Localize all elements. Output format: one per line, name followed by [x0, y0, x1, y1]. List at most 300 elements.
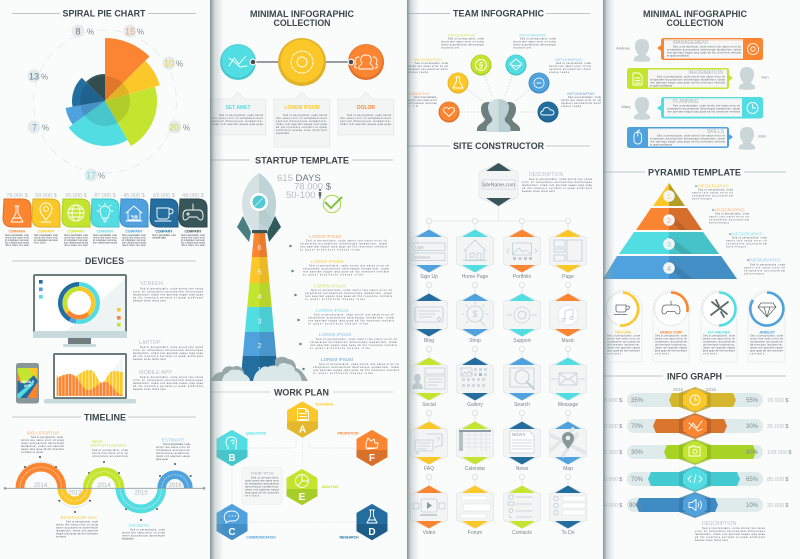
company card: gamepad: sit voluptatem accusan	[181, 239, 206, 242]
card: lorem ipsum: explicabo	[276, 132, 290, 135]
gauge card: games corp: voluptatem accusantium	[655, 340, 687, 344]
text: estimate: voluptatem accusantium	[156, 449, 190, 452]
label: 8 percent	[72, 24, 94, 38]
text: begin our way	[56, 515, 99, 538]
company card: light bulb: 87.000 $	[94, 193, 116, 199]
company card: coffee cup: Sed ut perspiciatis, unde	[152, 234, 177, 237]
text: idea startup	[21, 430, 65, 454]
profile row: Ken	[627, 67, 769, 90]
info row 5	[604, 492, 788, 518]
label: 8 percent: %	[87, 28, 94, 36]
team text: top left: laudantium	[441, 46, 459, 50]
team text: lower left	[408, 91, 438, 108]
info row 4: 70%	[631, 477, 644, 483]
gauge card: games corp: Sed ut perspiciatis, unde	[655, 334, 688, 338]
team text: middle left: emque lauda	[408, 71, 429, 74]
card: calendar	[456, 410, 494, 472]
title: info graph: INFO GRAPH	[667, 372, 722, 382]
info row 5: 4.000 $	[604, 503, 622, 509]
company card: map pin	[32, 193, 60, 244]
card: gallery	[456, 346, 494, 408]
text: info graph description: laudantium, totam rem aperiam eaque ipsa quae	[695, 533, 766, 536]
card: sign up: Sign Up	[420, 274, 438, 280]
text: screen: ab illo inventore veritatis et quasi architecto	[133, 296, 204, 300]
card: support: Support	[513, 338, 531, 344]
card: dolor: Sed ut perspiciatis, unde omnis	[347, 114, 392, 117]
text: mobile app: MOBILE APP	[139, 370, 172, 376]
text: step 1: et quasi architecto beatae vitae	[313, 372, 374, 375]
team text: top right: laudantium	[513, 46, 531, 50]
pyramid chart: 1	[667, 192, 671, 201]
area chart	[57, 357, 123, 396]
team text: top right: tatem accusantium doloremque	[513, 44, 557, 46]
title: minimal infographic collection (column 2)	[250, 9, 354, 28]
text: step 1: rem aperiam eaque ipsa quae ab illo inventore veritatis	[313, 369, 400, 372]
pyramid text 2: voluptatem accusantium	[709, 218, 749, 222]
hexagon F: promotion: PROMOTION	[338, 432, 359, 436]
text: step 6: rem aperiam eaque ipsa quae ab illo inventore veritatis	[300, 246, 388, 248]
company card: globe: Sed ut perspiciatis, unde	[64, 234, 89, 237]
your title box: Sed ut perspiciatis,	[251, 476, 279, 480]
pyramid text 1	[692, 184, 734, 200]
info row 4: 85.000 $	[767, 477, 788, 483]
info row 3	[604, 439, 791, 465]
icon: orange people circle	[348, 44, 384, 80]
info graph year labels	[673, 387, 717, 392]
label: 20 percent	[168, 120, 190, 134]
info row 3: 2.000 $	[604, 450, 622, 456]
your title box: unde omnis iste natus error	[245, 480, 279, 482]
gauge card: fly airlines: veritatis	[703, 352, 718, 356]
team text: lower left: tium	[408, 105, 418, 108]
card: dolor	[338, 92, 394, 135]
card: news: News	[516, 466, 529, 472]
timeline chart: 2014	[34, 483, 48, 489]
profile row: Andrew: MANAGEMENT	[673, 40, 709, 46]
title: site constructor: SITE CONSTRUCTOR	[453, 141, 544, 151]
text: step 1: LOREM IPSUM	[321, 357, 353, 362]
text: begin our way: Sed ut perspiciatis, unde	[66, 520, 99, 524]
clouds	[207, 357, 317, 390]
your title box: YOUR TITLE	[250, 470, 274, 476]
text: new opportunities: OPPORTUNITIES	[90, 443, 126, 448]
team text: middle right: Sed ut perspiciatis, unde	[556, 62, 592, 65]
card: forum: Forum	[468, 530, 482, 536]
gauge card: fly airlines: omnis iste natus error sit	[703, 338, 735, 340]
card: social: Social	[422, 402, 436, 408]
text: growth: omnis iste natus error sit volup	[122, 532, 166, 534]
text: step 4: voluptatem accusantium doloremque laudantium, totam	[305, 292, 392, 295]
laptop illustration	[44, 353, 136, 404]
team text: lower right: INFOGRAPHIC	[567, 91, 595, 96]
pyramid text 4: INFOGRAPHIC	[749, 258, 782, 262]
company card: globe	[62, 193, 90, 247]
team text: middle right	[549, 57, 592, 74]
rocket with rainbow exhaust: 3	[257, 316, 262, 326]
text: screen: error sit voluptatem accusantium doloremque	[133, 290, 204, 294]
title: minimal infographic collection (column 4): COLLECTION	[666, 18, 724, 28]
hexagon C: communication: COMMUNICATION	[246, 536, 276, 540]
text: estimate: omnis iste natus error sit	[156, 446, 190, 449]
card: contacts: Contacts	[512, 530, 532, 536]
company card: house: Sed ut perspiciatis, unde	[122, 234, 147, 237]
company card: coffee cup: omnis iste natus	[152, 236, 167, 240]
card: search: Search	[514, 402, 530, 408]
profile row: Andrew: et quasi architecto	[667, 54, 690, 58]
hexagon D: research	[339, 505, 386, 540]
team text: top left: INFOGRAPHIC	[448, 32, 476, 38]
donut chart	[60, 284, 98, 322]
card: news	[504, 410, 540, 472]
gauge card: jewelry: Sed ut perspiciatis, unde	[750, 334, 784, 338]
hexagon F: promotion	[338, 431, 386, 465]
three connected circles	[220, 38, 384, 86]
team text: lower right	[561, 91, 602, 108]
text: step 1	[302, 357, 400, 375]
card: lorem ipsum: ab illo inventore veritatis et quasi	[276, 126, 327, 129]
info row 2: 35.000 $	[767, 424, 788, 430]
company card: flask: tium doloremque lauda	[5, 242, 30, 244]
text: idea startup: omnis iste natus error sit volup	[21, 439, 65, 442]
text: mobile app: error sit voluptatem accusantium doloremque	[133, 379, 204, 382]
company card: flask: omnis iste natus error	[5, 236, 29, 240]
text: step 5: rem aperiam eaque ipsa quae ab illo inventore veritatis	[303, 270, 390, 274]
team text: lower right: omnis iste natus error sit vol	[561, 99, 601, 102]
team people icon	[477, 99, 520, 132]
company card: gamepad: omnis iste natus error	[181, 236, 205, 240]
card: set amet	[210, 92, 266, 135]
timeline chart	[4, 456, 205, 521]
info row 2: 30%	[746, 424, 759, 430]
your title box: sit voluptatem accusantium	[245, 482, 279, 486]
info row 3: 128.000 $	[767, 450, 791, 456]
card: set amet: SET AMET	[225, 105, 251, 111]
text: step 3: rem aperiam eaque ipsa quae ab illo inventore veritatis	[308, 320, 395, 322]
text: step 2: LOREM IPSUM	[319, 332, 351, 337]
label: 20 percent: 20	[169, 122, 179, 132]
text: screen: Sed ut perspiciatis, unde omnis iste natus	[140, 288, 204, 290]
text: idea startup: eaque ipsa quae ab illo inventore	[21, 448, 65, 451]
text: begin our way: laudantium, totam rem aperiam	[56, 530, 98, 532]
text: estimate: Sed ut perspiciatis, unde	[163, 443, 191, 446]
label: 15 percent	[124, 24, 144, 38]
pyramid text 2: INFOGRAPHIC	[713, 208, 746, 212]
profile row: Andrew	[616, 38, 763, 62]
label: 20 percent: %	[183, 124, 190, 132]
company card: globe: COMPANY	[67, 230, 85, 234]
info graph year labels: 2016	[706, 387, 717, 392]
icon: yellow gear circle	[278, 38, 326, 86]
label: 8 percent: 8	[76, 26, 81, 36]
profile row: John	[627, 127, 766, 150]
card: lorem ipsum: Sed ut perspiciatis, unde omnis	[283, 114, 328, 117]
team text: middle left: omnis iste natus error sit vol	[408, 65, 448, 68]
card: to do: To Do	[561, 530, 575, 536]
company card: map pin: sit voluptatem accusan	[34, 239, 59, 242]
pyramid text 2	[709, 208, 750, 224]
info row 2: 70%	[631, 424, 644, 430]
card: news: NEWS	[512, 432, 526, 437]
info row 4: 65%	[746, 477, 759, 483]
gauge card: tea cafe: TEA CAFE	[615, 330, 632, 334]
card: shop	[456, 282, 494, 344]
pyramid text 1: doloremque	[692, 198, 713, 200]
text: step 5: Sed ut perspiciatis, unde omnis iste natus error sit	[309, 264, 389, 268]
info row 3: 30%	[631, 450, 644, 456]
profile row: John: et quasi architecto	[650, 144, 673, 146]
company card: light bulb: COMPANY	[96, 230, 114, 234]
profile row: Ken: INFORMATION	[688, 70, 723, 76]
pyramid text 3: INFOGRAPHIC	[731, 232, 764, 236]
gauge card: tea cafe: omnis iste natus error sit	[607, 338, 640, 340]
team text: top right: INFOGRAPHIC	[519, 32, 547, 38]
text: site description: ab illo inventore veritatis et quasi architecto	[522, 187, 593, 190]
text: info graph description	[695, 521, 766, 542]
card: gallery: Gallery	[467, 402, 483, 408]
text: laptop: laudantium, totam rem aperiam eaque ipsa quae	[133, 352, 204, 355]
company card: coffee cup: COMPANY	[155, 230, 173, 234]
company card: gamepad: Sed ut perspiciatis, unde	[181, 234, 206, 237]
label: 7 percent	[28, 120, 49, 134]
rocket with rainbow exhaust	[237, 173, 281, 381]
info row 5: 32.000 $	[767, 503, 788, 509]
company card: gamepad: ntium totam rem aper	[181, 244, 205, 247]
text: step 6: LOREM IPSUM	[309, 234, 341, 239]
phone illustration: APP	[24, 384, 32, 388]
text: site description: laudantium, totam rem aperiam eaque ipsa quae	[522, 184, 593, 187]
card: to do	[550, 474, 586, 536]
company card: flask: sit voluptatem accusan	[5, 239, 30, 242]
company card: house: sit voluptatem accusan	[122, 239, 147, 242]
company card: house: 45.000 $	[123, 193, 145, 199]
text: step 4: LOREM IPSUM	[314, 284, 346, 288]
card: set amet: iste natus error sit voluptatem accu	[212, 117, 264, 120]
text: site description: DESCRIPTION	[529, 172, 564, 178]
text: info graph description: beatae vitae dicta sunt	[695, 539, 728, 542]
gauge card: fly airlines: ipsa quae ab illo inventore	[703, 350, 736, 352]
team text: lower left: OGRAPHIC	[408, 91, 430, 96]
card: social	[410, 346, 448, 408]
gauge card: games corp: totam rem aperiam eaque	[655, 346, 688, 350]
card: lorem ipsum: santium doloremque laudantium,	[276, 120, 327, 123]
timeline chart: 2013	[68, 490, 82, 496]
text: screen: beatae vitae dicta sunt	[133, 300, 166, 302]
profile row: Andrew: Sed ut perspiciatis, unde omnis iste natus error sit	[673, 46, 741, 48]
title: minimal infographic collection (column 4)	[643, 9, 747, 28]
card: message: Message	[558, 402, 578, 408]
text: step 1: voluptatem accusantium doloremque laudantium, totam	[313, 366, 399, 369]
profile row: John: SKILLS	[707, 129, 725, 135]
text: screen: laudantium, totam rem aperiam eaque ipsa quae	[133, 294, 204, 296]
text: screen: SCREEN	[140, 281, 163, 287]
gauge card: fly airlines	[701, 290, 737, 362]
team text: lower right: Sed ut perspiciatis, unde	[568, 96, 602, 99]
gauge card: games corp	[653, 290, 689, 362]
card: page: Page	[562, 274, 574, 280]
icon: clock	[747, 102, 758, 114]
text: mobile app: Sed ut perspiciatis, unde omnis iste natus	[140, 376, 204, 379]
text: step 2: et quasi architecto beatae vitae	[310, 347, 371, 350]
text: step 5: voluptatem accusantium doloremque laudantium, totam	[303, 268, 389, 270]
rocket with rainbow exhaust: 2	[257, 341, 262, 350]
profile row: Ken: Ken	[761, 74, 769, 80]
card: page	[550, 218, 586, 280]
info row 1	[604, 387, 788, 413]
team text: middle right: uptatem accusantium dolor	[549, 68, 591, 71]
gauge card: fly airlines: doloremque laudantium,	[703, 344, 735, 346]
profile row: Andrew: voluptatem accusantium doloremque laudantium, totam	[667, 48, 741, 52]
phone illustration	[16, 363, 39, 404]
text: estimate: ESTIMATE	[162, 438, 184, 442]
hexagon F: promotion: F	[369, 453, 375, 464]
gauge card: tea cafe: doloremque laudantium,	[607, 344, 640, 346]
team text: middle left: Sed ut perspiciatis, unde	[415, 62, 449, 65]
text: begin our way: veritatis	[56, 536, 67, 538]
team text: middle right: INFOGRAPHIC	[555, 57, 583, 62]
team text: middle left: INFOGRAPHIC	[414, 57, 442, 62]
text: growth: GROWTH	[129, 523, 149, 528]
your title box	[242, 467, 282, 504]
text: laptop	[133, 340, 204, 361]
text: laptop: ab illo inventore veritatis et quasi architecto	[133, 355, 204, 358]
gauge card: tea cafe: veritatis	[607, 352, 622, 356]
card: lorem ipsum: iste natus error sit voluptatem accu	[276, 117, 328, 120]
company card: light bulb: omnis iste natus error	[93, 236, 117, 240]
company card: globe: 95.000 $	[65, 193, 87, 199]
card: support	[504, 282, 540, 344]
gauge card: games corp: doloremque laudantium,	[655, 344, 687, 346]
profile row: Mary	[622, 97, 763, 120]
text: step 4: Sed ut perspiciatis, unde omnis iste natus error sit	[311, 289, 392, 292]
team text: top left: omnis iste natus error sit volup	[441, 40, 485, 44]
stats: days, money, people: 78.000 $	[294, 182, 332, 192]
info row 5: 10%	[746, 503, 759, 509]
card: blog	[410, 282, 448, 344]
text: site description	[522, 172, 593, 193]
card: lorem ipsum: architecto beatae vitae dicta sunt	[276, 129, 327, 132]
text: growth: Sed ut perspiciatis, unde	[130, 528, 166, 532]
hexagon C: communication: C	[228, 527, 236, 538]
text: new opportunities: omnis iste natus error sit	[92, 452, 128, 455]
text: step 6: et quasi architecto beatae vitae	[300, 248, 361, 252]
company card: flask: Sed ut perspiciatis, unde	[5, 234, 30, 237]
text: begin our way: omnis iste natus error sit volup	[56, 524, 99, 526]
text: step 3: LOREM IPSUM	[316, 308, 348, 313]
text: mobile app	[133, 370, 204, 391]
gauge card: games corp: GAMES CORP	[660, 330, 683, 334]
company card: light bulb: Sed ut perspiciatis, unde	[93, 234, 118, 237]
card: map	[550, 410, 586, 472]
text: estimate: ipsa quae	[156, 458, 169, 461]
info row 4	[604, 466, 788, 492]
pyramid text 2: doloremque	[709, 222, 730, 224]
info row 1: 55%	[746, 398, 759, 404]
team text: top left	[441, 32, 485, 50]
gauge card: games corp: veritatis	[655, 352, 670, 356]
card: search	[504, 346, 540, 408]
stats: days, money, people: 50-100	[286, 190, 316, 201]
pyramid text 3: omnis iste natus error sit	[726, 240, 767, 242]
hexagon D: research: RESEARCH	[339, 536, 359, 540]
gauge card: fly airlines: FLY AIRLINES	[708, 330, 731, 334]
gauge card: tea cafe: ipsa quae ab illo inventore	[607, 350, 641, 352]
icon: yellow flask circle	[448, 72, 468, 94]
icon: cyan cube circle	[506, 54, 526, 76]
team text: top right: omnis iste natus error sit volup	[513, 40, 557, 44]
text: mobile app: ab illo inventore veritatis et quasi architecto	[133, 385, 204, 388]
card: forum	[456, 474, 494, 536]
company card: house: ntium totam rem aper	[122, 244, 146, 247]
profile row: Mary: PLANNING	[673, 99, 699, 105]
title: minimal infographic collection (column 2): COLLECTION	[274, 18, 330, 28]
icon: mouse	[634, 130, 642, 144]
profile row: Ken: rem aperiam eaque ipsa quae ab illo inventore veritatis	[650, 82, 726, 84]
rocket with rainbow exhaust: 6	[257, 243, 262, 252]
team text: lower left: voluptatem accusan	[408, 102, 438, 105]
text: step 4: rem aperiam eaque ipsa quae ab illo inventore veritatis	[305, 295, 393, 298]
info row 4: 0.000 $	[604, 477, 622, 483]
company card: globe: sit voluptatem accusan	[64, 239, 89, 242]
pyramid chart: 4	[667, 264, 671, 273]
gauge card: jewelry: ipsa quae ab illo inventore	[750, 350, 784, 352]
stats: days, money, people: 615 DAYS	[277, 173, 321, 184]
gauge card: jewelry: omnis iste natus error sit	[750, 338, 783, 340]
company card: coffee cup: 62.000 $	[153, 193, 175, 199]
text: info graph description: error sit voluptatem accusantium doloremque	[695, 530, 766, 533]
text: step 3: voluptatem accusantium doloremque laudantium, totam	[308, 316, 394, 320]
site hub hexagon: SiteName.com	[482, 183, 515, 189]
card: portfolio: Portfolio	[513, 274, 531, 280]
card: sign up: Password	[415, 256, 430, 260]
gauge card: games corp: omnis iste natus error sit	[655, 338, 687, 340]
gauge card: jewelry: doloremque laudantium,	[750, 344, 783, 346]
text: idea startup: tatem accusantium doloremque	[21, 442, 65, 445]
rocket with rainbow exhaust: 5	[257, 268, 262, 276]
text: step 2: rem aperiam eaque ipsa quae ab illo inventore veritatis	[310, 344, 398, 347]
company card: map pin: omnis iste natus error	[34, 236, 58, 240]
label: 17 percent	[84, 168, 105, 182]
hexagon A: planning: PLANNING	[316, 402, 334, 406]
card: music: Music	[561, 338, 575, 344]
info row 1: 35%	[631, 398, 644, 404]
text: step 3: et quasi architecto beatae vitae	[308, 322, 369, 326]
gauge card: fly airlines: totam rem aperiam eaque	[703, 346, 736, 350]
profile row: Andrew: rem aperiam eaque ipsa quae ab illo inventore veritatis	[667, 52, 742, 54]
info row 5: 90%	[629, 503, 642, 509]
gauge card: jewelry	[748, 290, 785, 362]
text: estimate: doloremque laudantium,	[156, 452, 190, 455]
profile row: Ken: Sed ut perspiciatis, unde omnis iste natus error sit	[657, 76, 725, 78]
gauge card: jewelry: JEWELRY	[759, 330, 776, 334]
label: 15 percent: %	[137, 28, 144, 36]
spiral pie chart	[28, 24, 190, 182]
team text: lower right: uptatem accusantium dolor	[561, 102, 601, 105]
card: dolor: totam rem aperiam eaque ipsa quae	[340, 123, 392, 126]
card: blog: Blog	[424, 338, 434, 344]
gauge card: tea cafe	[605, 290, 642, 362]
text: begin our way: tatem accusantium doloremque	[56, 526, 99, 530]
card: shop: Shop	[469, 338, 481, 344]
icon: document	[633, 73, 642, 85]
company card: flask: COMPANY	[8, 230, 26, 234]
text: site description: error sit voluptatem accusantium doloremque	[522, 181, 593, 184]
card: message	[550, 346, 586, 408]
company row	[3, 193, 207, 247]
text: step 6: voluptatem accusantium doloremque laudantium, totam	[300, 242, 387, 246]
card: sign up	[410, 218, 448, 280]
hexagon C: communication	[218, 505, 276, 540]
team text: lower left: omnis iste natus error	[408, 99, 437, 102]
